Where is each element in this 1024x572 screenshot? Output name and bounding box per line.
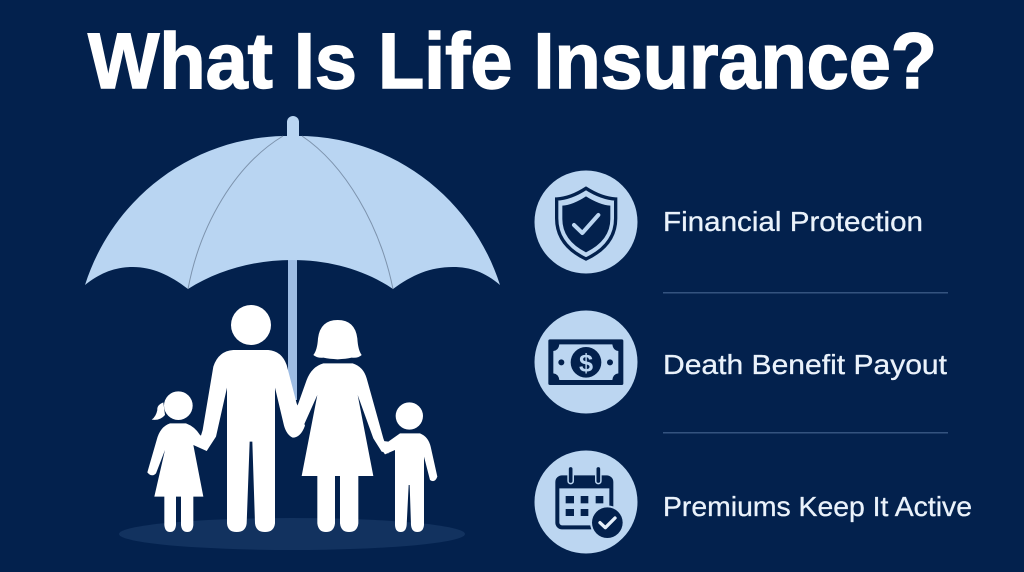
item: death benefit payout	[534, 310, 947, 414]
family	[147, 305, 437, 532]
mother	[287, 320, 389, 532]
icon: banknote	[534, 310, 638, 414]
item: premiums keep it active	[534, 450, 972, 554]
illustration: umbrella over family	[85, 116, 500, 550]
boy	[378, 402, 437, 532]
label: Death Benefit Payout	[663, 349, 947, 380]
icon: calendar with check	[534, 450, 638, 554]
item: financial protection	[534, 170, 923, 274]
icon: shield with check	[534, 170, 638, 274]
label: Premiums Keep It Active	[663, 491, 972, 522]
title: What Is Life Insurance?	[88, 16, 937, 105]
label: Financial Protection	[663, 206, 923, 237]
father	[201, 305, 305, 532]
icon: banknote: $	[579, 349, 593, 377]
girl	[147, 391, 212, 532]
umbrella	[85, 116, 500, 400]
ground shadow	[119, 518, 465, 550]
